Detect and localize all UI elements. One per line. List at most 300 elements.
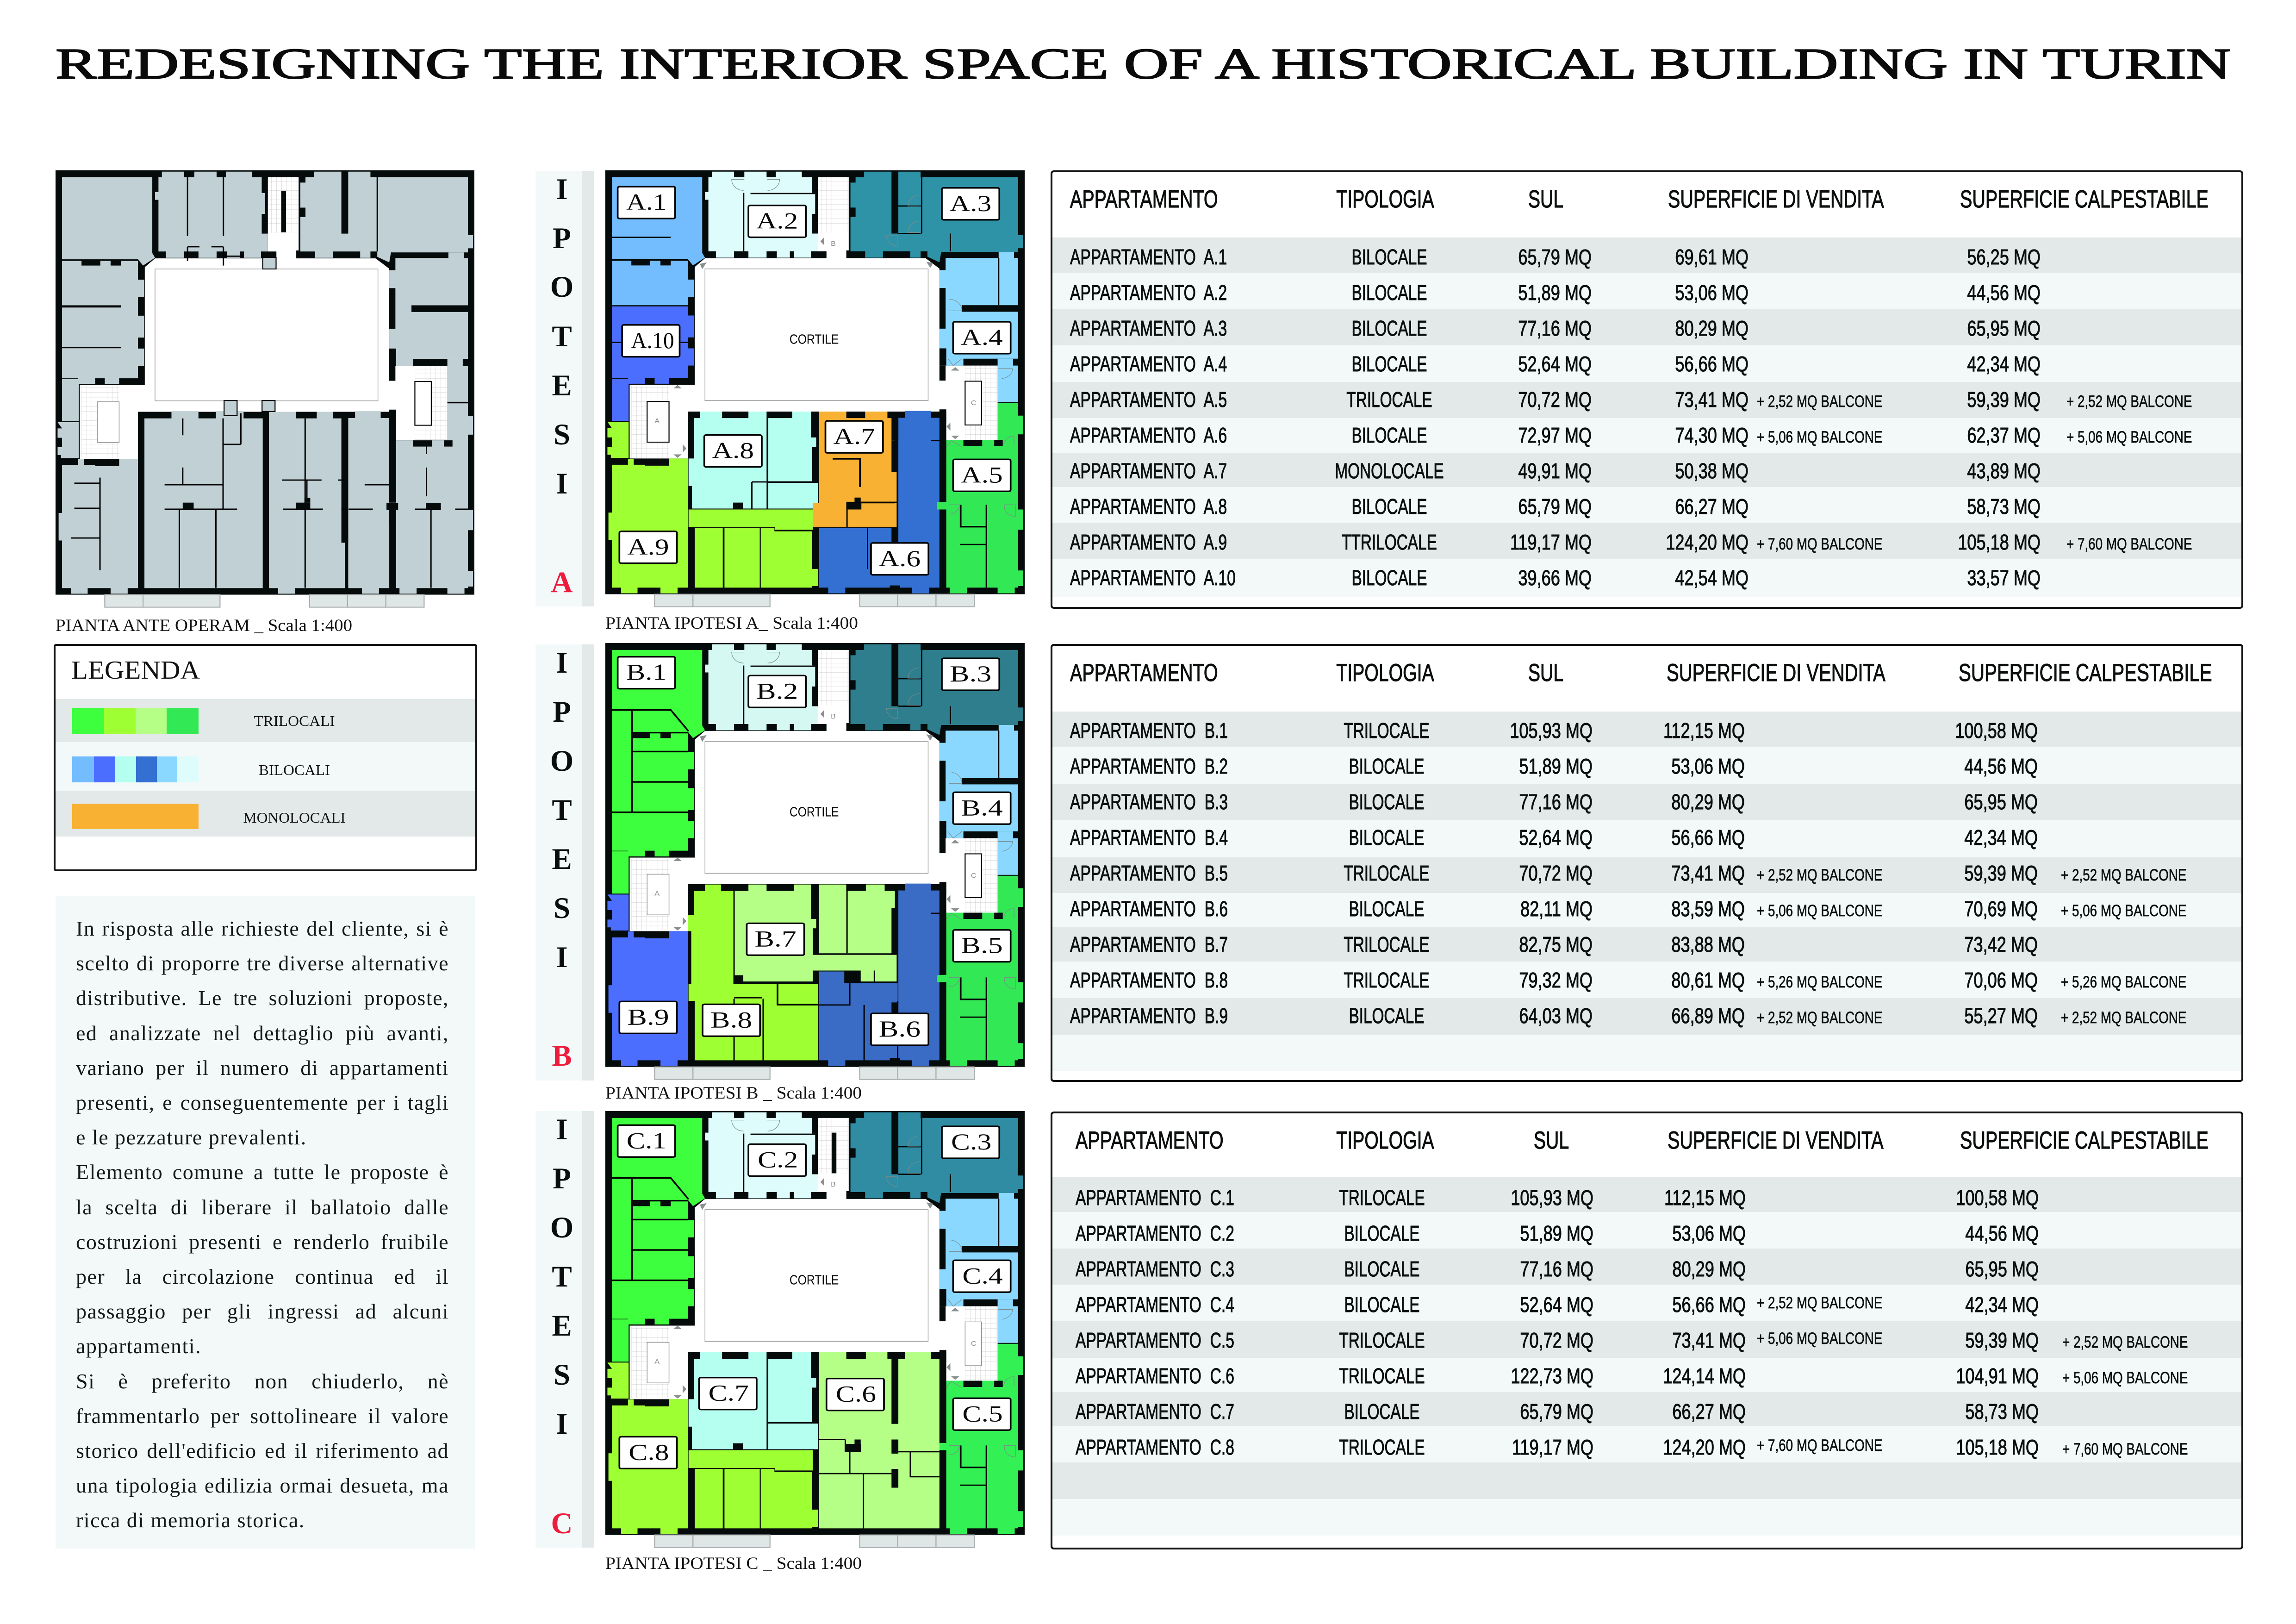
label B.2 (748, 675, 806, 707)
row B.4: APPARTAMENTO B.4 (1070, 825, 1228, 849)
label B.5: B.5 (961, 933, 1003, 958)
floor plan: ante operam (56, 170, 474, 607)
row C.7: BILOCALE (1344, 1399, 1420, 1424)
label C.6: C.6 (836, 1381, 876, 1407)
row C.1: 112,15 MQ (1664, 1186, 1746, 1210)
row A.4: APPARTAMENTO A.4 (1070, 352, 1227, 376)
table header B: SUPERFICIE CALPESTABILE (1959, 659, 2212, 687)
stair letters: A (654, 1358, 660, 1366)
side band: ipotesi A: E (552, 369, 572, 402)
row C.1: 105,93 MQ (1511, 1186, 1593, 1210)
row A.5: TRILOCALE (1346, 387, 1432, 412)
row B.9: BILOCALE (1349, 1004, 1425, 1028)
label B.5 (953, 930, 1011, 962)
row A.1: 69,61 MQ (1675, 245, 1748, 269)
row C.2: BILOCALE (1344, 1221, 1420, 1245)
label C.8: C.8 (628, 1440, 669, 1465)
label A.9: A.9 (627, 534, 669, 560)
row B.4: 56,66 MQ (1671, 825, 1745, 849)
caption: ante operam: PIANTA ANTE OPERAM _ Scala 1:400 (56, 616, 352, 635)
text block: project description: e le pezzature prevalenti. (76, 1125, 307, 1149)
caption: ipotesi C: PIANTA IPOTESI C _ Scala 1:400 (605, 1554, 862, 1573)
row B.6 (1052, 898, 2241, 921)
side band: ipotesi C: O (550, 1211, 573, 1244)
stair letters: C (971, 1340, 977, 1348)
row A.10: 39,66 MQ (1518, 566, 1592, 590)
row B.4 (1052, 827, 2241, 850)
table header A: SUPERFICIE CALPESTABILE (1960, 186, 2209, 213)
label B.4 (953, 792, 1011, 824)
row A.3: 77,16 MQ (1518, 316, 1592, 340)
row A.1: BILOCALE (1351, 245, 1427, 269)
row B.9: APPARTAMENTO B.9 (1070, 1004, 1228, 1028)
label B.1: B.1 (626, 660, 666, 685)
row C.6: APPARTAMENTO C.6 (1076, 1364, 1234, 1388)
side band: ipotesi A: P (553, 222, 571, 255)
row C.6: + 5,06 MQ BALCONE (2062, 1369, 2188, 1387)
label B.6: B.6 (879, 1016, 921, 1042)
side band: ipotesi A: I (556, 173, 568, 206)
row C.1: 100,58 MQ (1956, 1186, 2039, 1210)
table header B: SUPERFICIE DI VENDITA (1667, 659, 1885, 687)
row C.4: 56,66 MQ (1672, 1293, 1746, 1317)
label C.6 (827, 1379, 884, 1411)
row C.4: 52,64 MQ (1520, 1293, 1593, 1317)
row C.7: 65,79 MQ (1520, 1399, 1593, 1424)
row A.7 (1052, 460, 2241, 483)
row C.3: BILOCALE (1344, 1257, 1420, 1281)
row A.3: 65,95 MQ (1967, 316, 2041, 340)
table header C: SUPERFICIE CALPESTABILE (1960, 1127, 2209, 1154)
label C.4: C.4 (962, 1263, 1003, 1289)
row C.2 (1052, 1223, 2241, 1246)
row A.5: 70,72 MQ (1518, 387, 1592, 412)
row A.8: 66,27 MQ (1675, 494, 1748, 518)
row C.3: APPARTAMENTO C.3 (1076, 1257, 1234, 1281)
row A.10: 42,54 MQ (1675, 566, 1748, 590)
text block: project description: la scelta di liberare il ballatoio dalle (76, 1195, 449, 1219)
row B.5: 59,39 MQ (1964, 861, 2038, 885)
row B.7: 73,42 MQ (1964, 932, 2038, 956)
row A.9 (1052, 531, 2241, 555)
row A.4 (1052, 353, 2241, 376)
row B.5: 70,72 MQ (1519, 861, 1593, 885)
row C.4: APPARTAMENTO C.4 (1076, 1293, 1234, 1317)
text block: project description (56, 896, 475, 1549)
label B.9: B.9 (627, 1004, 669, 1030)
side band: ipotesi C: S (554, 1358, 570, 1392)
row B.9: 66,89 MQ (1671, 1004, 1745, 1028)
label C.5 (953, 1398, 1011, 1430)
legend label: bilocali: BILOCALI (259, 762, 330, 778)
row A.9: 124,20 MQ (1666, 530, 1748, 554)
cortile label: CORTILE (790, 332, 839, 347)
side band: ipotesi B: I (556, 646, 568, 680)
row C.8: 105,18 MQ (1956, 1435, 2039, 1459)
label A.3 (942, 188, 999, 220)
row A.7: 43,89 MQ (1967, 459, 2041, 483)
label A.1: A.1 (626, 189, 666, 215)
row A.8 (1052, 496, 2241, 519)
stair letters (654, 712, 977, 898)
text block: project description: In risposta alle richieste del cliente, si è (76, 917, 449, 940)
table header B: SUL (1528, 659, 1563, 687)
row C.5: APPARTAMENTO C.5 (1076, 1328, 1234, 1352)
label C.5: C.5 (962, 1401, 1003, 1427)
row A.2: APPARTAMENTO A.2 (1070, 281, 1227, 305)
label B.2: B.2 (756, 678, 798, 704)
table header A: APPARTAMENTO (1070, 186, 1218, 213)
label C.7 (699, 1378, 757, 1410)
text block: project description: appartamenti. (76, 1334, 201, 1358)
row B.3: 77,16 MQ (1519, 790, 1593, 814)
row B.1: 112,15 MQ (1663, 718, 1745, 743)
stair letters: B (831, 1181, 836, 1188)
legend heading: LEGENDA (71, 656, 200, 685)
row B.3: APPARTAMENTO B.3 (1070, 790, 1228, 814)
side band: ipotesi A: T (552, 320, 572, 353)
stair letters: B (831, 240, 836, 248)
label C.8 (619, 1437, 677, 1468)
label C.3: C.3 (951, 1129, 991, 1155)
row A.7: 49,91 MQ (1518, 459, 1592, 483)
label B.7 (747, 923, 804, 955)
row B.7: TRILOCALE (1344, 932, 1430, 956)
row A.6 (1052, 425, 2241, 448)
side band: ipotesi C: I (556, 1113, 568, 1146)
row C.8: + 7,60 MQ BALCONE (2062, 1440, 2188, 1458)
legend swatch: monolocali (72, 804, 199, 829)
row C.6: TRILOCALE (1339, 1364, 1425, 1388)
stair letters: C (971, 872, 977, 880)
label B.4: B.4 (961, 795, 1003, 821)
side band: ipotesi A: O (550, 270, 573, 304)
row C.2: 53,06 MQ (1672, 1221, 1746, 1245)
row B.5: + 2,52 MQ BALCONE (2061, 866, 2186, 884)
row C.8: APPARTAMENTO C.8 (1076, 1435, 1234, 1459)
label B.8: B.8 (710, 1007, 752, 1033)
row B.2 (1052, 756, 2241, 779)
row B.6: + 5,06 MQ BALCONE (2061, 902, 2186, 920)
stair letters (654, 240, 977, 425)
label A.2 (748, 206, 806, 237)
text block: project description: variano per il numero di appartamenti (76, 1056, 449, 1080)
side band: ipotesi B: S (554, 892, 570, 925)
legend swatch: bilocali (72, 756, 199, 782)
cortile label: CORTILE (790, 805, 839, 819)
floor plan: ipotesi C (605, 1111, 1025, 1548)
label B.9 (619, 1001, 677, 1033)
row A.3: BILOCALE (1351, 316, 1427, 340)
side band: ipotesi B (535, 644, 594, 1081)
row A.3: 80,29 MQ (1675, 316, 1748, 340)
row B.4: 52,64 MQ (1519, 825, 1593, 849)
row A.10 (1052, 567, 2241, 590)
label B.1 (618, 657, 675, 689)
text block: project description: Elemento comune a tutte le proposte è (76, 1160, 449, 1184)
legend label: trilocali: TRILOCALI (254, 712, 335, 729)
text block: project description: una tipologia edilizia ormai desueta, ma (76, 1474, 449, 1497)
row B.5: APPARTAMENTO B.5 (1070, 861, 1228, 885)
row A.8: 58,73 MQ (1967, 494, 2041, 518)
row A.2: 53,06 MQ (1675, 281, 1748, 305)
row A.5: + 2,52 MQ BALCONE (1757, 393, 1882, 411)
row B.9 (1052, 1005, 2241, 1028)
row A.1: 56,25 MQ (1967, 245, 2041, 269)
row B.3: BILOCALE (1349, 790, 1425, 814)
table header A: SUPERFICIE DI VENDITA (1668, 186, 1884, 213)
row C.5: 70,72 MQ (1520, 1328, 1593, 1352)
row B.2: 51,89 MQ (1519, 754, 1593, 778)
label C.3 (942, 1126, 999, 1158)
side band: ipotesi C: I (556, 1407, 568, 1441)
row B.5: 73,41 MQ (1671, 861, 1745, 885)
side band: ipotesi C (535, 1111, 594, 1548)
label A.9 (619, 531, 677, 563)
row A.1: 65,79 MQ (1518, 245, 1592, 269)
panel: table ipotesi A (1052, 172, 2241, 607)
side band: ipotesi B: O (550, 744, 573, 778)
legend swatch: trilocali (72, 708, 199, 734)
row C.5: 73,41 MQ (1672, 1328, 1746, 1352)
row B.6: 83,59 MQ (1671, 897, 1745, 921)
row A.3: APPARTAMENTO A.3 (1070, 316, 1227, 340)
row A.5: 73,41 MQ (1675, 387, 1748, 412)
row A.8: APPARTAMENTO A.8 (1070, 494, 1227, 518)
text block: project description: ricca di memoria storica. (76, 1508, 305, 1532)
text block: project description: scelto di proporre tre diverse alternative (76, 951, 449, 975)
row A.4: 56,66 MQ (1675, 352, 1748, 376)
row C.2: APPARTAMENTO C.2 (1076, 1221, 1234, 1245)
row C.6: 104,91 MQ (1956, 1364, 2039, 1388)
row A.4: BILOCALE (1351, 352, 1427, 376)
row A.9: 105,18 MQ (1958, 530, 2041, 554)
table header C: APPARTAMENTO (1076, 1127, 1224, 1154)
row B.1: APPARTAMENTO B.1 (1070, 718, 1228, 743)
row A.6: APPARTAMENTO A.6 (1070, 423, 1227, 447)
stair letters: A (654, 890, 660, 898)
text block: project description: storico dell'edificio ed il riferimento ad (76, 1439, 449, 1462)
row B.1: 100,58 MQ (1955, 718, 2038, 743)
table header B: TIPOLOGIA (1336, 659, 1434, 687)
side band: ipotesi C: E (552, 1309, 572, 1343)
row B.6: + 5,06 MQ BALCONE (1757, 902, 1882, 920)
caption: ipotesi B: PIANTA IPOTESI B _ Scala 1:400 (605, 1084, 862, 1103)
table header C: SUL (1534, 1127, 1569, 1154)
row B.7: 82,75 MQ (1519, 932, 1593, 956)
row B.3 (1052, 791, 2241, 814)
row B.1: 105,93 MQ (1510, 718, 1593, 743)
row A.7: MONOLOCALE (1335, 459, 1444, 483)
row C.3: 80,29 MQ (1672, 1257, 1746, 1281)
caption: ipotesi A: PIANTA IPOTESI A_ Scala 1:400 (605, 614, 858, 633)
row C.4: BILOCALE (1344, 1293, 1420, 1317)
row B.7 (1052, 934, 2241, 957)
row C.8: 119,17 MQ (1512, 1435, 1593, 1459)
row A.9: APPARTAMENTO A.9 (1070, 530, 1227, 554)
text block: project description: frammentarlo per sottolineare il valore (76, 1404, 449, 1428)
label C.1 (618, 1125, 675, 1157)
cortile label: CORTILE (790, 1273, 839, 1287)
panel: table ipotesi B (1052, 646, 2241, 1080)
row A.7: 50,38 MQ (1675, 459, 1748, 483)
label A.5: A.5 (961, 462, 1003, 488)
label C.4 (953, 1260, 1011, 1292)
text block: project description: presenti, e conseguentemente per i tagli (76, 1091, 449, 1114)
label A.10 (622, 325, 679, 357)
row A.8: BILOCALE (1351, 494, 1427, 518)
table header C: SUPERFICIE DI VENDITA (1668, 1127, 1884, 1154)
label B.7: B.7 (754, 926, 796, 952)
label A.8 (704, 435, 762, 467)
row B.6: BILOCALE (1349, 897, 1425, 921)
row C.5 (1052, 1330, 2241, 1353)
row B.8: + 5,26 MQ BALCONE (1757, 973, 1882, 991)
row A.2: 44,56 MQ (1967, 281, 2041, 305)
row A.6: BILOCALE (1351, 423, 1427, 447)
row B.5 (1052, 862, 2241, 886)
row B.2: APPARTAMENTO B.2 (1070, 754, 1228, 778)
side band: ipotesi B: P (553, 695, 571, 729)
row A.9: TTRILOCALE (1342, 530, 1437, 554)
row B.8: 79,32 MQ (1519, 968, 1593, 992)
row A.10: BILOCALE (1351, 566, 1427, 590)
row A.1 (1052, 246, 2241, 269)
label A.7 (826, 421, 883, 453)
floor plan: ipotesi B (605, 643, 1025, 1080)
row A.10: 33,57 MQ (1967, 566, 2041, 590)
row A.9: 119,17 MQ (1510, 530, 1592, 554)
row C.5: + 2,52 MQ BALCONE (2062, 1333, 2188, 1351)
row C.4: + 2,52 MQ BALCONE (1757, 1294, 1882, 1312)
row A.2 (1052, 282, 2241, 305)
row B.5: TRILOCALE (1344, 861, 1430, 885)
row C.2: 51,89 MQ (1520, 1221, 1593, 1245)
row B.7: 83,88 MQ (1671, 932, 1745, 956)
side band: ipotesi B: I (556, 941, 568, 974)
side band: ipotesi A: A (551, 566, 573, 599)
label B.8 (703, 1004, 760, 1036)
row C.6 (1052, 1365, 2241, 1388)
row C.7: APPARTAMENTO C.7 (1076, 1399, 1234, 1424)
row C.7: 58,73 MQ (1965, 1399, 2039, 1424)
row C.1 (1052, 1187, 2241, 1210)
row B.8: TRILOCALE (1344, 968, 1430, 992)
text block: project description: distributive. Le tre soluzioni proposte, (76, 986, 449, 1010)
row C.3: 77,16 MQ (1520, 1257, 1593, 1281)
row B.6: 70,69 MQ (1964, 897, 2038, 921)
row A.6: + 5,06 MQ BALCONE (2066, 428, 2192, 446)
title: REDESIGNING THE INTERIOR SPACE OF A HISTORICAL BUILDING IN TURIN (56, 40, 2231, 88)
label A.6: A.6 (879, 546, 921, 571)
row B.6: 82,11 MQ (1520, 897, 1593, 921)
row A.4: 52,64 MQ (1518, 352, 1592, 376)
stair letters: B (831, 712, 836, 720)
row A.6: 74,30 MQ (1675, 423, 1748, 447)
legend label: monolocali: MONOLOCALI (243, 809, 345, 826)
row C.7: 66,27 MQ (1672, 1399, 1746, 1424)
row C.1: APPARTAMENTO C.1 (1076, 1186, 1234, 1210)
row A.5: APPARTAMENTO A.5 (1070, 387, 1227, 412)
table header B (1052, 661, 2241, 684)
table header C (1052, 1128, 2241, 1151)
table header A (1052, 187, 2241, 210)
row A.10: APPARTAMENTO A.10 (1070, 566, 1236, 590)
label A.8: A.8 (712, 438, 754, 463)
row C.5: + 5,06 MQ BALCONE (1757, 1330, 1882, 1348)
label C.1: C.1 (627, 1128, 666, 1154)
row B.9: 64,03 MQ (1519, 1004, 1593, 1028)
row C.2: 44,56 MQ (1965, 1221, 2039, 1245)
row B.8: 70,06 MQ (1964, 968, 2038, 992)
row B.9: 55,27 MQ (1964, 1004, 2038, 1028)
label A.5 (953, 459, 1011, 491)
label A.10: A.10 (631, 328, 674, 353)
label A.6 (871, 543, 928, 575)
row C.8: 124,20 MQ (1663, 1435, 1746, 1459)
floor plan: ipotesi A (605, 170, 1025, 607)
stair letters: A (654, 418, 660, 425)
label A.7: A.7 (834, 424, 875, 450)
side band: ipotesi B: B (552, 1039, 572, 1073)
row C.6: 124,14 MQ (1663, 1364, 1746, 1388)
row B.8: APPARTAMENTO B.8 (1070, 968, 1228, 992)
side band: ipotesi A: S (554, 418, 570, 451)
label A.3: A.3 (950, 191, 991, 216)
stair letters (654, 1181, 977, 1366)
row B.4: BILOCALE (1349, 825, 1425, 849)
panel: table ipotesi C (1052, 1113, 2241, 1548)
row C.4: 42,34 MQ (1965, 1293, 2039, 1317)
row A.9: + 7,60 MQ BALCONE (1757, 535, 1882, 553)
label B.3: B.3 (950, 661, 991, 687)
row A.4: 42,34 MQ (1967, 352, 2041, 376)
row B.2: 53,06 MQ (1671, 754, 1745, 778)
row C.3: 65,95 MQ (1965, 1257, 2039, 1281)
row B.3: 80,29 MQ (1671, 790, 1745, 814)
row B.8: + 5,26 MQ BALCONE (2061, 973, 2186, 991)
row A.7: APPARTAMENTO A.7 (1070, 459, 1227, 483)
row B.5: + 2,52 MQ BALCONE (1757, 866, 1882, 884)
row B.2: BILOCALE (1349, 754, 1425, 778)
label A.1 (618, 187, 675, 219)
row B.6: APPARTAMENTO B.6 (1070, 897, 1228, 921)
row B.8: 80,61 MQ (1671, 968, 1745, 992)
row B.4: 42,34 MQ (1964, 825, 2038, 849)
text block: project description: passaggio per gli ingressi ad alcuni (76, 1299, 449, 1323)
row B.9: + 2,52 MQ BALCONE (1757, 1009, 1882, 1027)
label B.6 (871, 1013, 928, 1045)
row C.3 (1052, 1258, 2241, 1281)
label C.2: C.2 (758, 1147, 798, 1173)
side band: ipotesi C: C (551, 1507, 572, 1540)
row C.8: + 7,60 MQ BALCONE (1757, 1437, 1882, 1455)
row C.5: TRILOCALE (1339, 1328, 1425, 1352)
text block: project description: ed analizzate nel dettaglio più avanti, (76, 1021, 449, 1045)
label B.3 (942, 658, 999, 690)
row A.6: 62,37 MQ (1967, 423, 2041, 447)
side band: ipotesi A: I (556, 467, 568, 500)
row A.8: 65,79 MQ (1518, 494, 1592, 518)
row A.2: BILOCALE (1351, 281, 1427, 305)
row B.8 (1052, 969, 2241, 993)
row A.5: 59,39 MQ (1967, 387, 2041, 412)
row C.8: TRILOCALE (1339, 1435, 1425, 1459)
row A.5: + 2,52 MQ BALCONE (2066, 393, 2192, 411)
row B.1: TRILOCALE (1344, 718, 1430, 743)
row A.5 (1052, 389, 2241, 412)
label A.4 (953, 322, 1011, 354)
